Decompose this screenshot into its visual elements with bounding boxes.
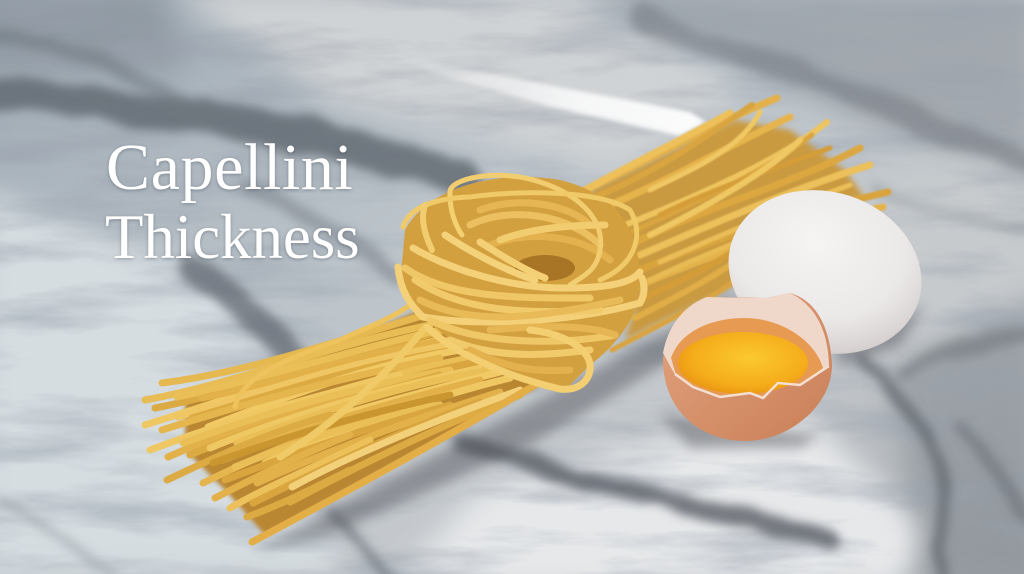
whole white egg [707,166,943,378]
title: Capellini [106,131,353,204]
pasta: coiled nest [398,175,644,390]
pasta shadows [255,295,925,550]
title [104,131,360,272]
light glare [395,56,706,136]
egg yolk [678,332,808,394]
pasta: upper right strands [575,98,888,350]
title: Thickness [105,202,360,272]
cracked brown egg [663,293,832,441]
pasta: lower left strands [145,305,540,542]
